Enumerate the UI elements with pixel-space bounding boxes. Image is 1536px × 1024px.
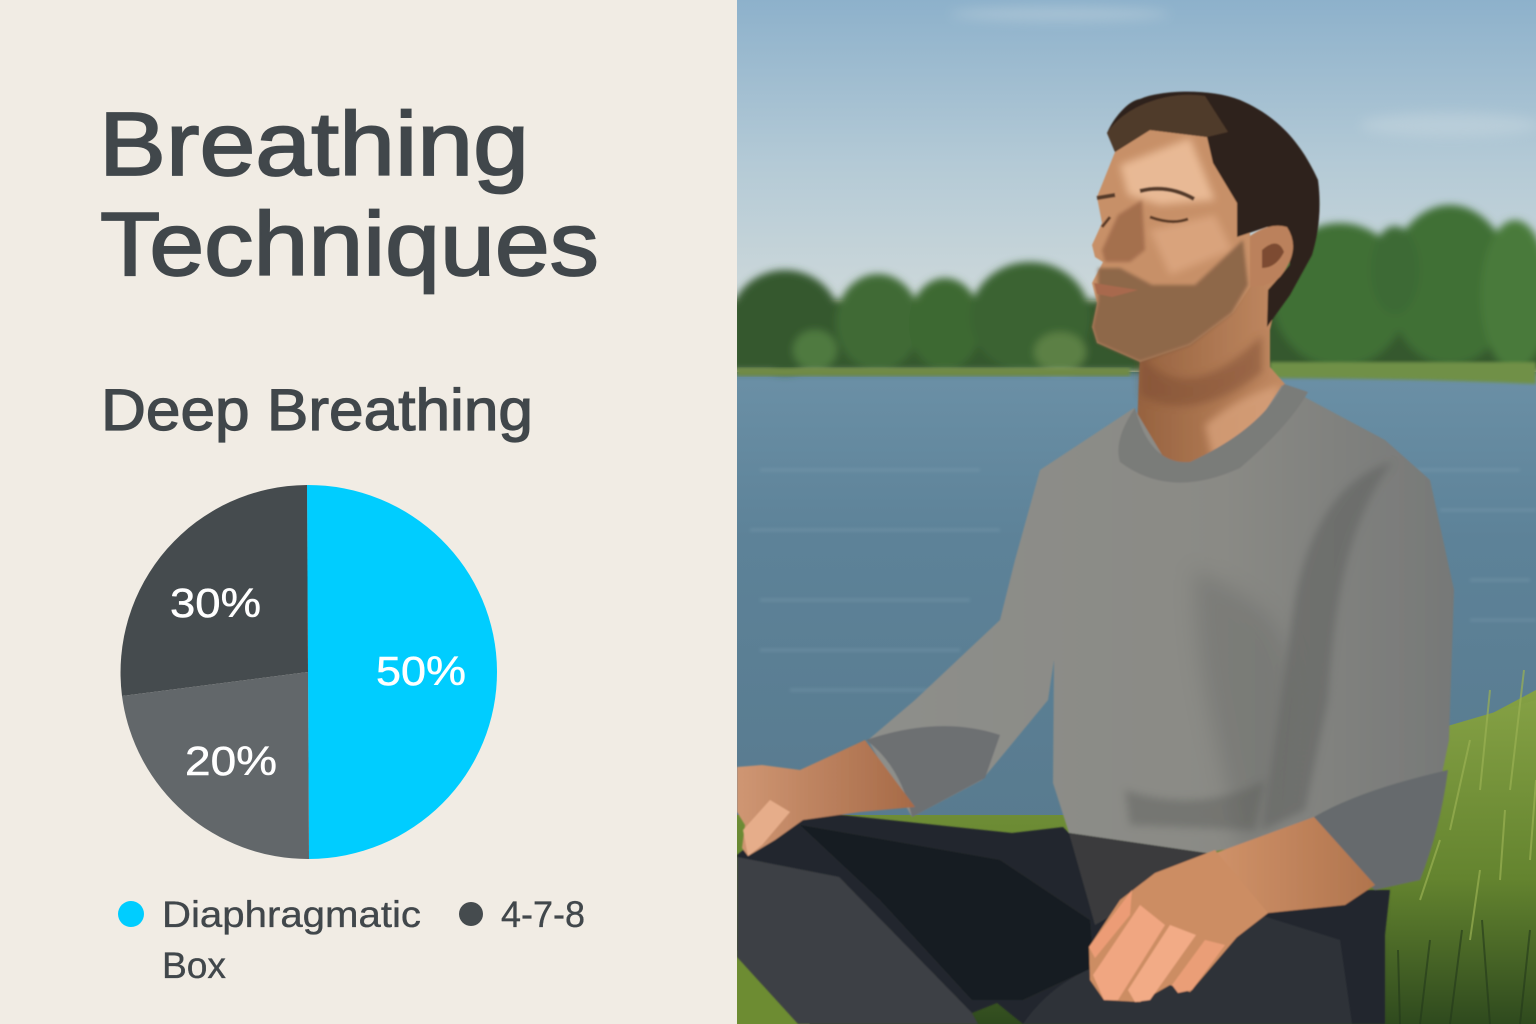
sleeve shadow [1262, 462, 1392, 830]
front knee [1023, 915, 1352, 1024]
slice: Diaphragmatic 50% [307, 485, 497, 859]
left hand and forearm [737, 740, 915, 856]
grass blades [1420, 670, 1536, 940]
trousers [737, 812, 1390, 1024]
slice: Box 20% [122, 672, 309, 859]
man [737, 92, 1454, 1024]
closed eye [1102, 217, 1188, 227]
title: Breathing [99, 95, 529, 195]
slice: 4-7-8 30% [121, 485, 308, 696]
hair [1107, 92, 1320, 327]
ear [1250, 226, 1293, 287]
legend dot: 4-7-8 [459, 902, 483, 926]
panel: left text and chart panel [0, 0, 737, 1024]
legend dot: Diaphragmatic [118, 901, 144, 927]
lips [1094, 283, 1138, 297]
hair highlight [1107, 95, 1228, 152]
title [99, 95, 599, 295]
face shadow [1102, 200, 1145, 262]
clouds [950, 7, 1536, 137]
title: Techniques [100, 195, 599, 295]
near shin [737, 857, 978, 1024]
left thumb [743, 800, 790, 856]
far shore [737, 368, 1130, 376]
legend [118, 894, 585, 986]
panel: photo of man meditating by a lake [730, 0, 1536, 1024]
label: 20%: 20% [185, 738, 277, 784]
grass [737, 690, 1536, 1024]
face highlight [1120, 138, 1215, 205]
eyebrows [1097, 189, 1194, 199]
right hand back [1089, 850, 1268, 1002]
legend label: 4-7-8: 4-7-8 [501, 894, 585, 935]
right forearm [1216, 816, 1376, 914]
collar [1118, 384, 1308, 483]
water ripples [750, 470, 1536, 690]
trouser centre panel [1069, 833, 1206, 925]
label: 50%: 50% [376, 648, 466, 694]
beard [1092, 240, 1248, 362]
sky [737, 0, 1536, 300]
fingers [1089, 890, 1132, 958]
legend label: Diaphragmatic: Diaphragmatic [162, 894, 421, 935]
sweater body and sleeves [868, 385, 1454, 888]
pie chart [121, 485, 497, 859]
treeline [730, 205, 1536, 374]
neck [1136, 278, 1286, 463]
inner ear [1262, 243, 1284, 268]
heading: Deep Breathing: Deep Breathing [101, 378, 533, 443]
label: 30%: 30% [170, 580, 261, 626]
trouser shadow [800, 825, 1094, 1000]
water [737, 372, 1536, 852]
legend label: Box: Box [162, 945, 226, 986]
head [1092, 128, 1250, 362]
sleeve cuffs [1298, 770, 1448, 890]
